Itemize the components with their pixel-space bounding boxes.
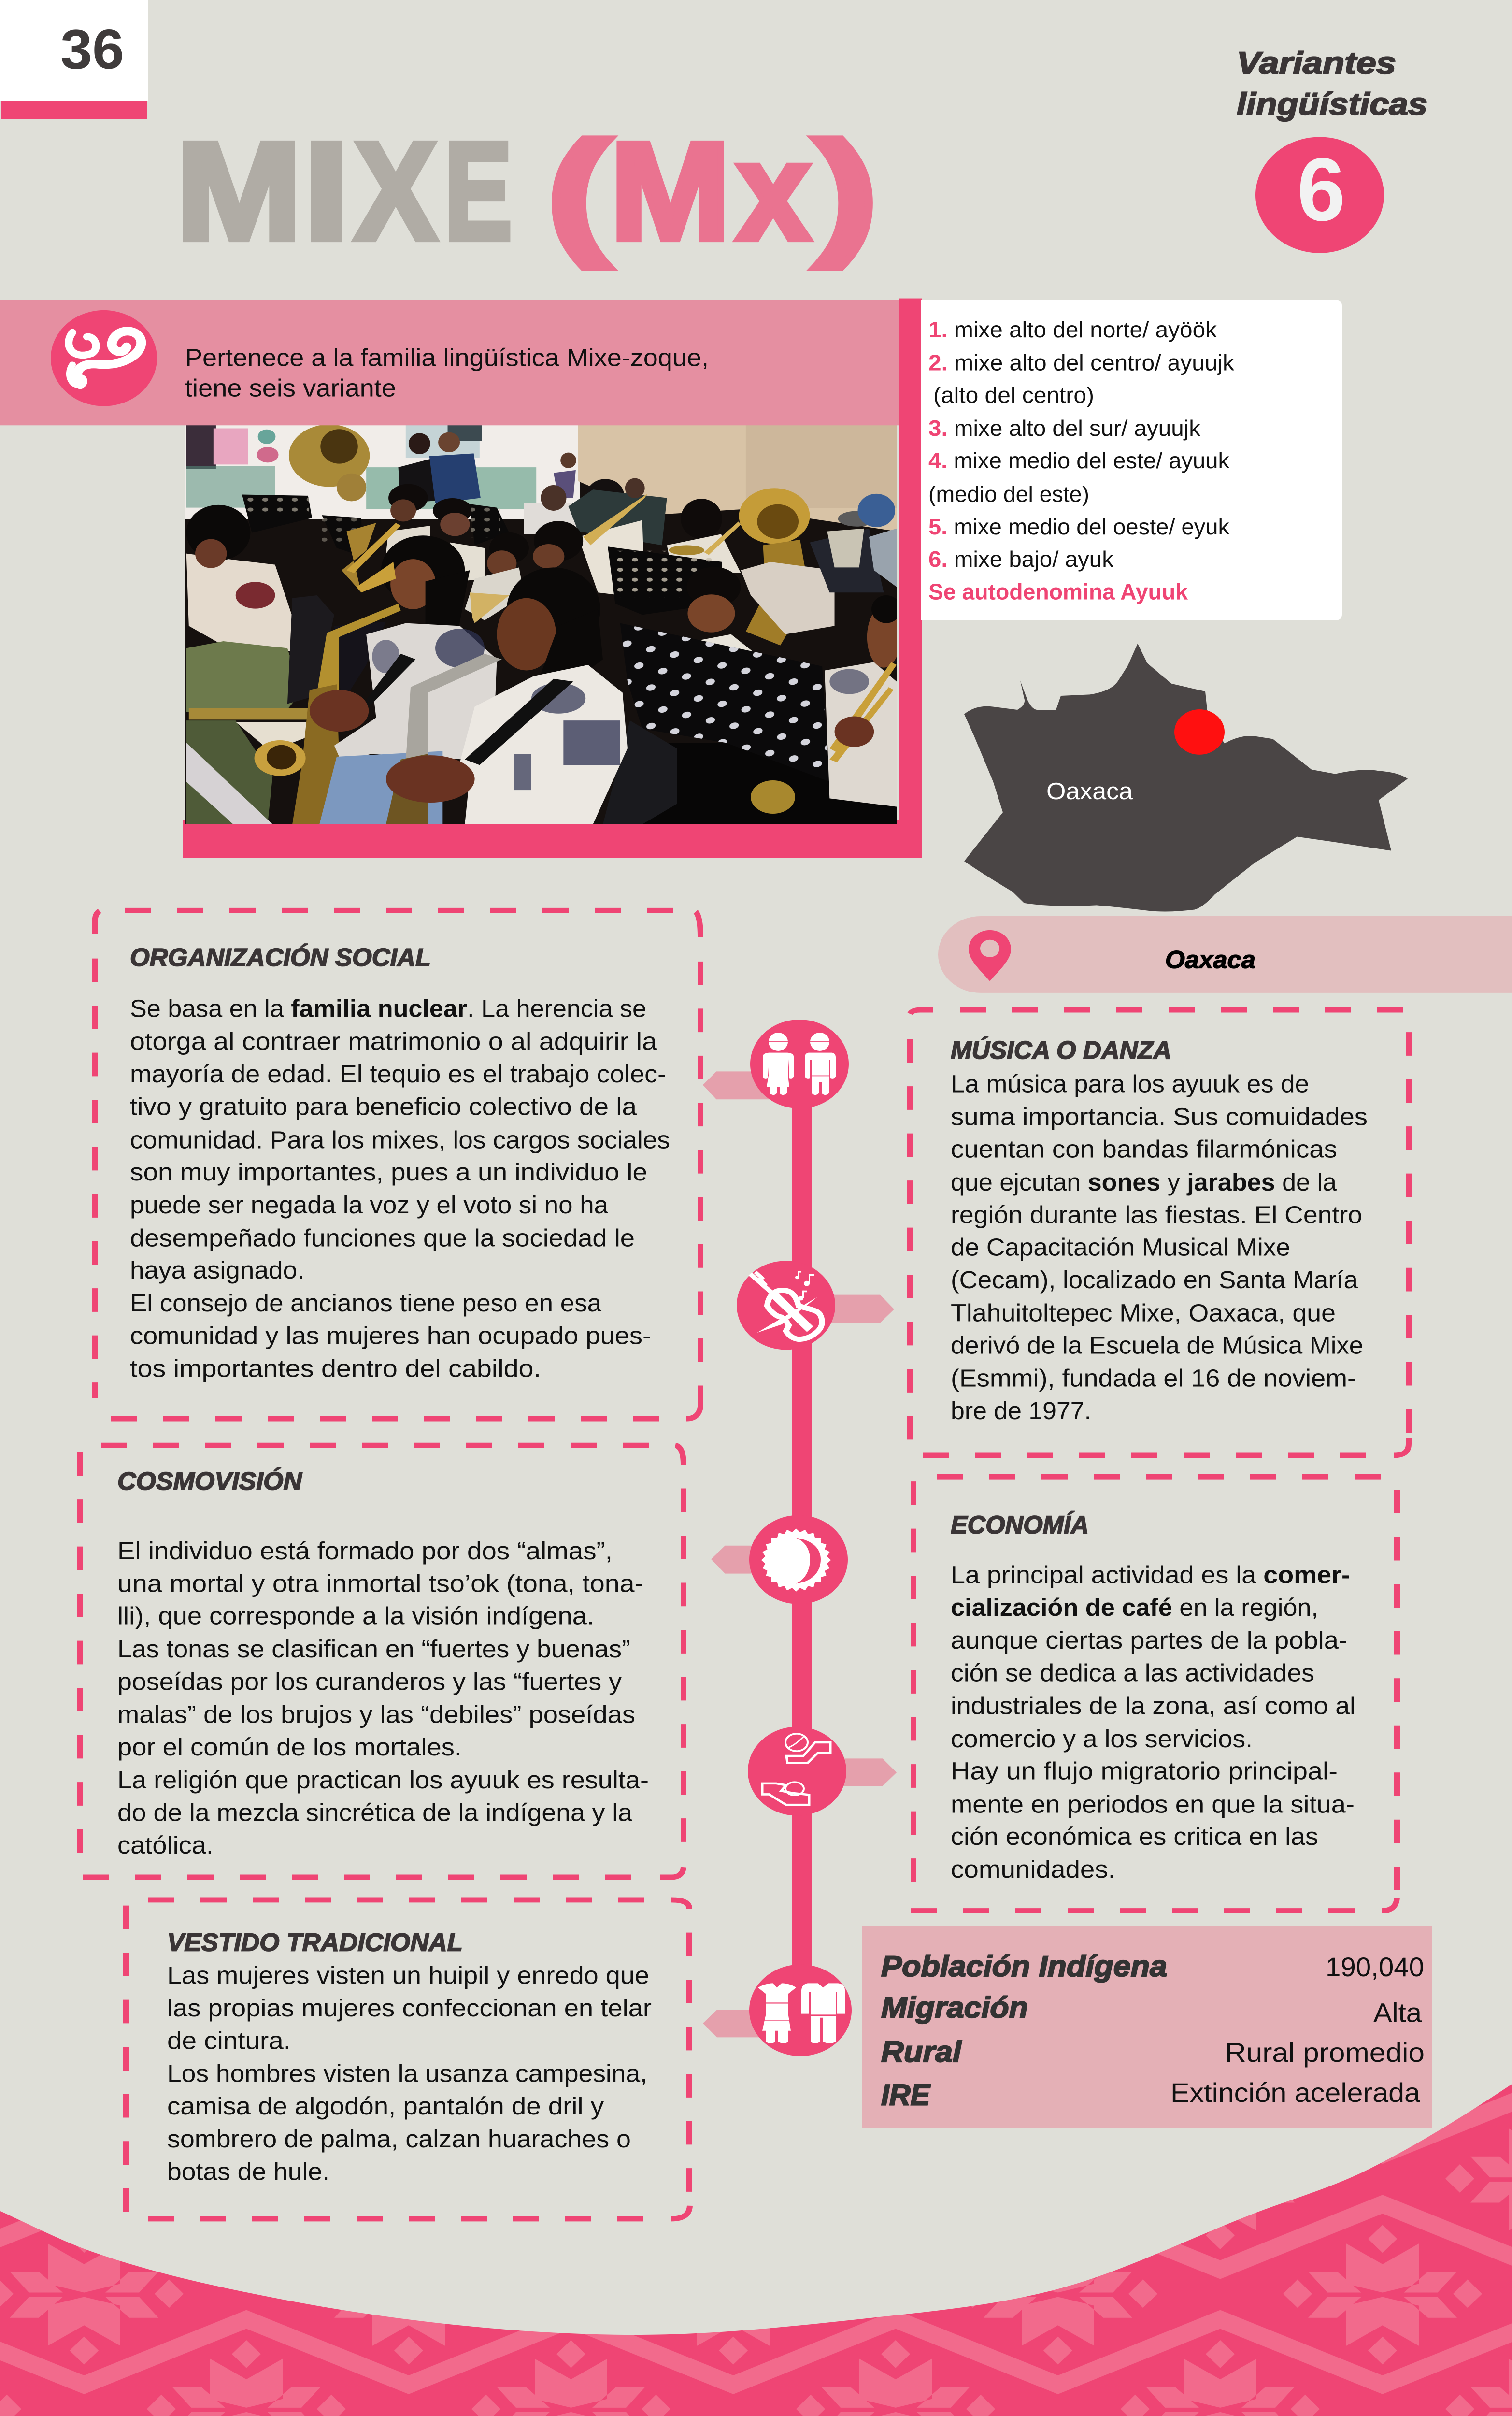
- arrow: cosmovisión: [711, 1546, 783, 1574]
- panel: statistics: Rural: [881, 2035, 962, 2068]
- panel: organización social: comunidad y las mujeres han ocupado pues-: [130, 1323, 651, 1350]
- title: (: [546, 114, 613, 270]
- panel: vestido tradicional: sombrero de palma, calzan huaraches o: [167, 2126, 631, 2153]
- icon: man and woman: [750, 1020, 849, 1108]
- panel: organización social: haya asignado.: [130, 1257, 304, 1284]
- map of Oaxaca: Oaxaca: [1046, 777, 1133, 804]
- panel: organización social: desempeñado funciones que la sociedad le: [130, 1225, 635, 1252]
- page number tab: 36: [60, 18, 124, 80]
- title: X: [355, 114, 437, 269]
- page number tab: [0, 0, 148, 119]
- timeline bar: [792, 1064, 812, 2024]
- panel: vestido tradicional: Los hombres visten la usanza campesina,: [167, 2060, 647, 2087]
- icon: sun and moon: [749, 1515, 848, 1604]
- icon: traditional clothing: [749, 1965, 852, 2056]
- title: M: [176, 114, 302, 269]
- arrow: vestido: [703, 2010, 783, 2037]
- panel: economía: aunque ciertas partes de la pobla-: [951, 1627, 1347, 1654]
- panel: economía: Hay un flujo migratorio principal-: [951, 1758, 1338, 1785]
- panel: vestido tradicional: botas de hule.: [167, 2158, 329, 2186]
- panel: statistics: [862, 1926, 1432, 2128]
- variantes lingüísticas count: lingüísticas: [1237, 86, 1427, 122]
- panel: statistics: Alta: [1373, 1998, 1422, 2028]
- band: language family: [0, 300, 899, 425]
- title: M: [610, 114, 730, 269]
- icon: location pin: [969, 930, 1011, 981]
- panel: cosmovisión: poseídas por los curanderos y las “fuertes y: [117, 1668, 622, 1696]
- panel: statistics: Rural promedio: [1225, 2038, 1425, 2068]
- panel: economía: [911, 1477, 1397, 1911]
- panel: música o danza: región durante las fiestas. El Centro: [951, 1202, 1362, 1229]
- panel: organización social: ORGANIZACIÓN SOCIAL: [130, 943, 431, 971]
- panel: organización social: El consejo de ancianos tiene peso en esa: [130, 1290, 601, 1317]
- panel: organización social: mayoría de edad. El tequio es el trabajo colec-: [130, 1061, 666, 1088]
- panel: música o danza: bre de 1977.: [951, 1397, 1091, 1424]
- panel: variant list: 3. mixe alto del sur/ ayuujk: [928, 416, 1201, 441]
- title: I: [303, 114, 350, 269]
- panel: variant list: 6. mixe bajo/ ayuk: [928, 547, 1114, 572]
- panel: organización social: Se basa en la familia nuclear. La herencia se: [130, 995, 646, 1022]
- panel: música o danza: MÚSICA O DANZA: [951, 1036, 1171, 1064]
- panel: cosmovisión: una mortal y otra inmortal tso’ok (tona, tona-: [117, 1570, 643, 1597]
- panel: música o danza: derivó de la Escuela de Música Mixe: [951, 1332, 1363, 1359]
- panel: música o danza: La música para los ayuuk es de: [951, 1071, 1309, 1098]
- panel: variant list: 4. mixe medio del este/ ayuuk: [928, 448, 1230, 473]
- panel: cosmovisión: lli), que corresponde a la visión indígena.: [117, 1603, 594, 1630]
- panel: economía: ción económica es critica en las: [951, 1824, 1318, 1851]
- bottom woven pattern band: [0, 2084, 1512, 2416]
- panel: statistics: IRE: [881, 2078, 931, 2112]
- title: x: [737, 114, 811, 269]
- panel: cosmovisión: malas” de los brujos y las “debiles” poseídas: [117, 1701, 635, 1728]
- panel: statistics: Extinción acelerada: [1170, 2078, 1420, 2108]
- panel: cosmovisión: COSMOVISIÓN: [117, 1467, 302, 1496]
- panel: economía: La principal actividad es la comer-: [951, 1562, 1350, 1589]
- panel: economía: ción se dedica a las actividades: [951, 1660, 1314, 1687]
- panel: variant list: (medio del este): [928, 482, 1089, 507]
- panel: música o danza: (Cecam), localizado en Santa María: [951, 1267, 1358, 1294]
- panel: economía: comunidades.: [951, 1856, 1115, 1883]
- panel: cosmovisión: El individuo está formado por dos “almas”,: [117, 1538, 613, 1565]
- variantes lingüísticas count: Variantes: [1237, 45, 1396, 81]
- title: ): [814, 114, 878, 270]
- icon: violin: [737, 1261, 835, 1350]
- panel: cosmovisión: do de la mezcla sincrética de la indígena y la: [117, 1799, 632, 1826]
- panel: vestido tradicional: camisa de algodón, pantalón de dril y: [167, 2093, 604, 2120]
- panel: vestido tradicional: las propias mujeres confeccionan en telar: [167, 1995, 652, 2022]
- panel: organización social: puede ser negada la voz y el voto si no ha: [130, 1192, 608, 1219]
- map of Oaxaca: [964, 644, 1408, 911]
- panel: organización social: otorga al contraer matrimonio o al adquirir la: [130, 1028, 657, 1055]
- panel: vestido tradicional: de cintura.: [167, 2028, 291, 2055]
- panel: cosmovisión: por el común de los mortales.: [117, 1734, 462, 1761]
- variantes lingüísticas count: [1237, 45, 1427, 253]
- panel: música o danza: que ejcutan sones y jarabes de la: [951, 1169, 1337, 1196]
- panel: música o danza: cuentan con bandas filarmónicas: [951, 1136, 1337, 1163]
- panel: variant list: (alto del centro): [933, 383, 1094, 408]
- panel: economía: cialización de café en la región,: [951, 1595, 1318, 1622]
- icon: hands with coffee beans: [748, 1726, 846, 1816]
- panel: statistics: 190,040: [1326, 1952, 1424, 1982]
- panel: organización social: comunidad. Para los mixes, los cargos sociales: [130, 1127, 670, 1154]
- panel: variant list: [921, 300, 1342, 620]
- arrow: organización: [703, 1071, 783, 1099]
- panel: economía: mente en periodos en que la situa-: [951, 1791, 1355, 1818]
- panel: vestido tradicional: Las mujeres visten un huipil y enredo que: [167, 1962, 649, 1989]
- band: language family: Pertenece a la familia lingüística Mixe-zoque,: [185, 345, 709, 372]
- panel: statistics: Migración: [881, 1991, 1028, 2024]
- panel: variant list: Se autodenomina Ayuuk: [928, 580, 1188, 604]
- panel: organización social: tos importantes dentro del cabildo.: [130, 1355, 541, 1382]
- panel: música o danza: suma importancia. Sus comuidades: [951, 1104, 1368, 1131]
- icon: swirl: [51, 310, 157, 406]
- location pill: Oaxaca: [1165, 947, 1255, 974]
- panel: música o danza: (Esmmi), fundada el 16 de noviem-: [951, 1365, 1356, 1392]
- panel: cosmovisión: La religión que practican los ayuuk es resulta-: [117, 1767, 649, 1794]
- panel: cosmovisión: católica.: [117, 1832, 214, 1859]
- panel: cosmovisión: [80, 1445, 684, 1877]
- panel: música o danza: de Capacitación Musical Mixe: [951, 1234, 1290, 1261]
- panel: vestido tradicional: [126, 1900, 690, 2219]
- title: [176, 114, 878, 270]
- panel: economía: comercio y a los servicios.: [951, 1726, 1253, 1753]
- panel: organización social: [95, 910, 700, 1419]
- band: language family: tiene seis variante: [185, 375, 396, 402]
- panel: variant list: 5. mixe medio del oeste/ eyuk: [928, 515, 1230, 539]
- panel: statistics: Población Indígena: [881, 1949, 1167, 1983]
- panel: cosmovisión: Las tonas se clasifican en “fuertes y buenas”: [117, 1636, 630, 1663]
- arrow: economía: [831, 1758, 897, 1786]
- photo: mixe band with pink frame: [183, 299, 922, 858]
- panel: variant list: 2. mixe alto del centro/ ayuujk: [928, 351, 1235, 375]
- panel: variant list: 1. mixe alto del norte/ ayöök: [928, 317, 1217, 342]
- panel: organización social: son muy importantes, pues a un individuo le: [130, 1159, 647, 1186]
- variantes lingüísticas count: 6: [1297, 140, 1345, 240]
- panel: música o danza: [910, 1010, 1409, 1455]
- title: E: [444, 114, 512, 269]
- panel: música o danza: Tlahuitoltepec Mixe, Oaxaca, que: [951, 1300, 1336, 1327]
- location pill: [938, 916, 1512, 993]
- panel: economía: industriales de la zona, así como al: [951, 1693, 1355, 1720]
- panel: organización social: tivo y gratuito para beneficio colectivo de la: [130, 1093, 637, 1121]
- panel: economía: ECONOMÍA: [951, 1510, 1089, 1539]
- panel: vestido tradicional: VESTIDO TRADICIONAL: [167, 1928, 463, 1956]
- arrow: música: [821, 1295, 894, 1323]
